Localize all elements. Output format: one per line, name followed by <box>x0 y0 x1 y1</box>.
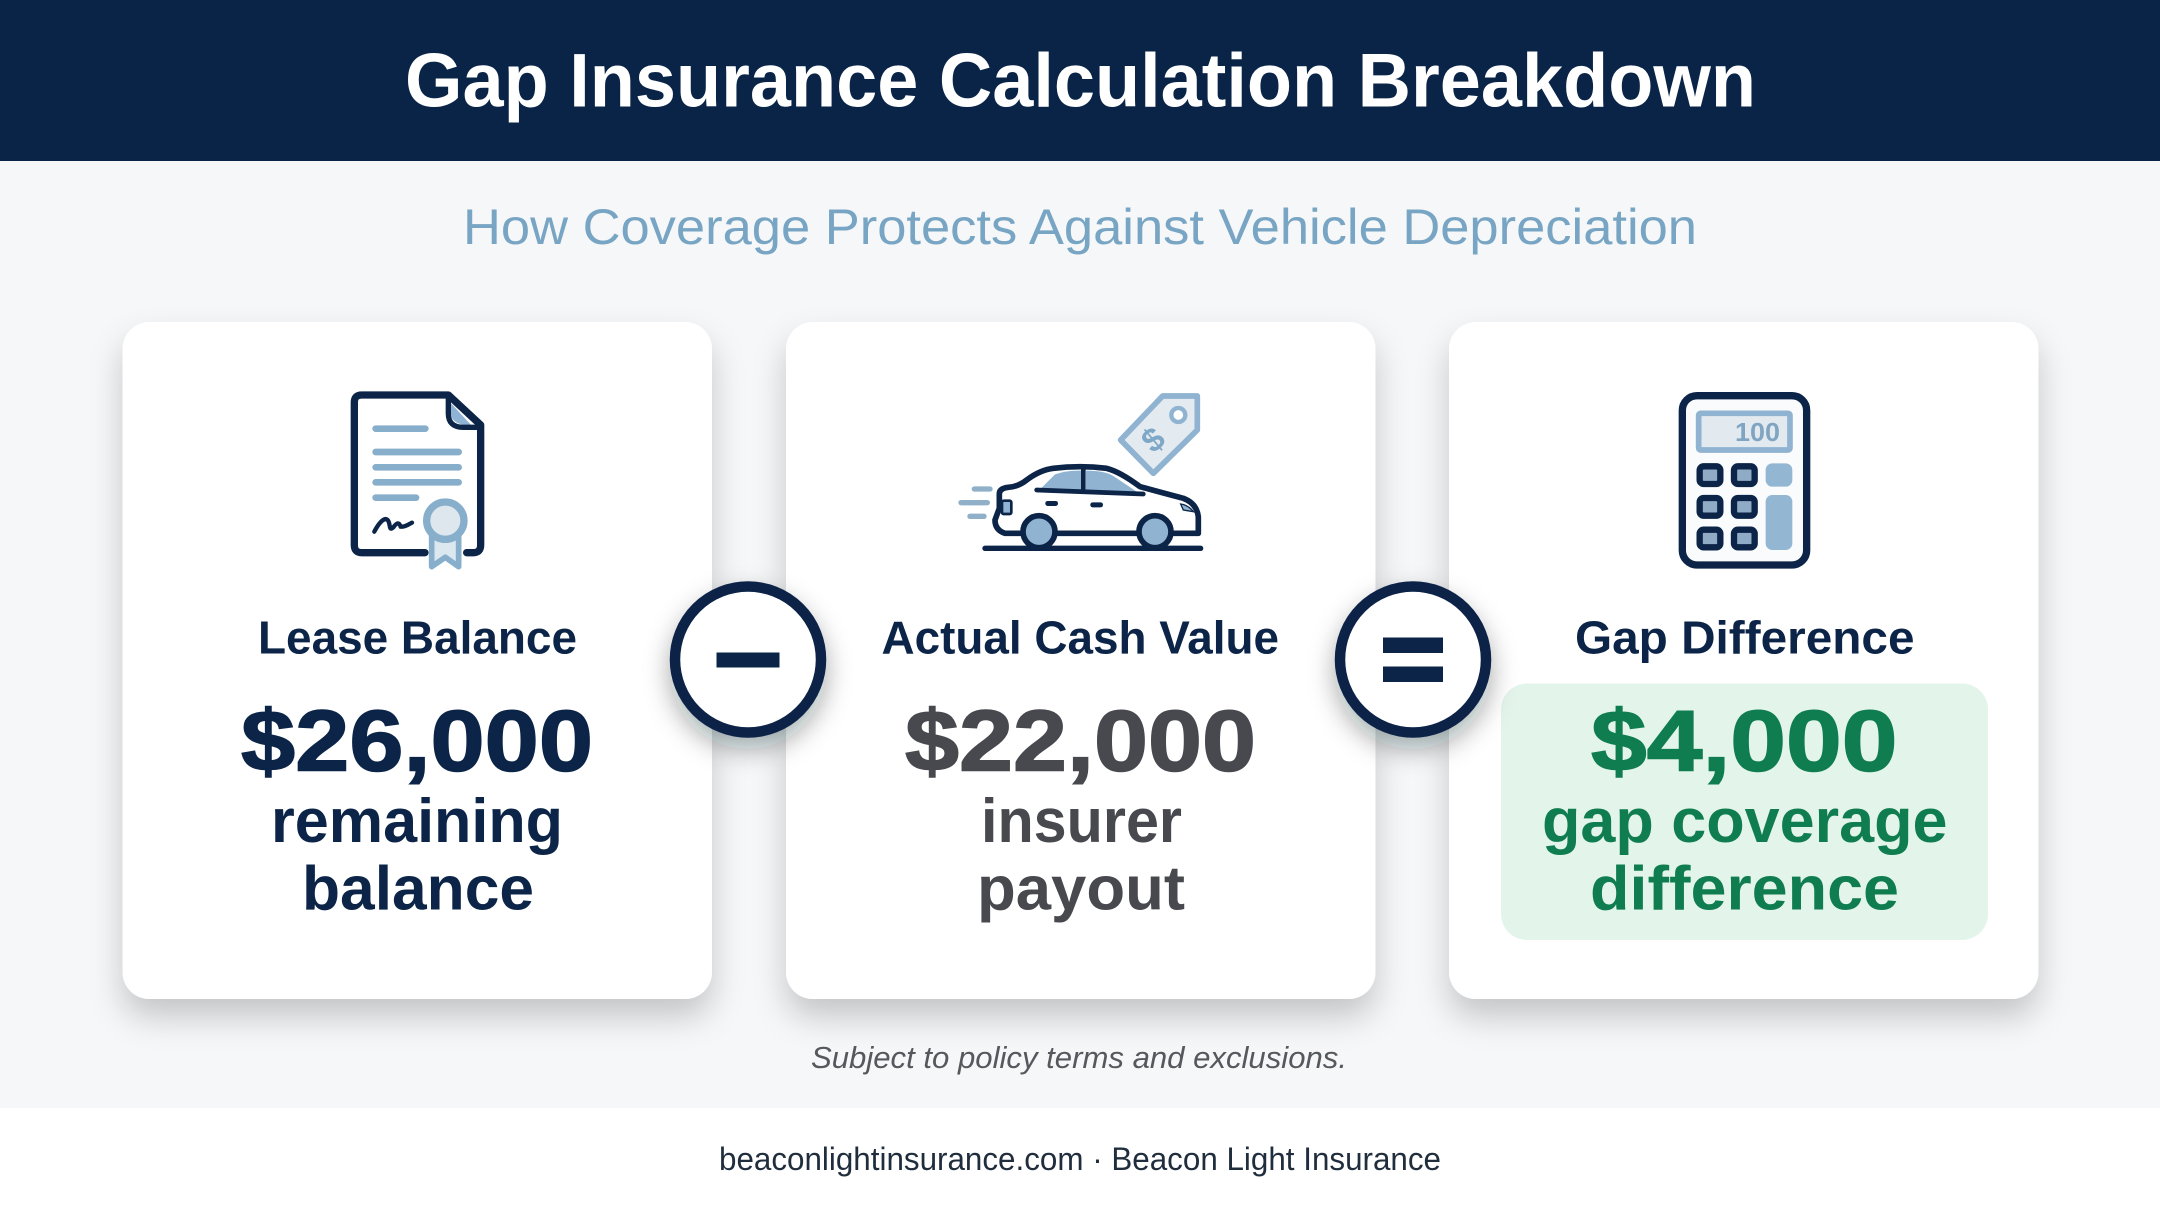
value: 4000: $4,000 <box>1591 694 1898 790</box>
value: 22000: $22,000 <box>905 694 1256 790</box>
panel: lease balance <box>122 322 712 999</box>
caption: gap coverage difference: difference <box>1590 854 1899 924</box>
caption: remaining balance: balance <box>302 854 534 924</box>
panel: actual cash value <box>786 322 1376 999</box>
highlight box: gap result <box>1501 684 1988 940</box>
icon: car with price tag <box>961 396 1201 548</box>
subtitle: How Coverage Protects Against Vehicle Depreciation <box>463 199 1697 255</box>
caption: insurer payout: payout <box>977 854 1185 924</box>
header band with title <box>0 0 2160 161</box>
panel: gap difference <box>1449 322 2038 999</box>
icon: car with price tag: $ <box>1135 420 1173 461</box>
operator: minus <box>675 586 821 732</box>
icon: calculator <box>1682 396 1807 565</box>
footer text: beaconlightinsurance.com · Beacon Light Insurance <box>719 1141 1441 1177</box>
icon: lease document with seal <box>354 395 481 567</box>
footer <box>0 1108 2160 1206</box>
caption: insurer payout <box>977 787 1185 924</box>
footnote: Subject to policy terms and exclusions. <box>811 1040 1347 1075</box>
caption: gap coverage difference <box>1542 787 1948 924</box>
title: Gap Insurance Calculation Breakdown <box>405 38 1756 124</box>
icon: calculator: 100 <box>1735 417 1780 447</box>
caption: insurer payout: insurer <box>981 787 1182 856</box>
value: 26000: $26,000 <box>241 694 593 790</box>
operator: equals <box>1340 586 1486 732</box>
heading: actual cash value: Actual Cash Value <box>882 612 1279 664</box>
heading: lease balance: Lease Balance <box>258 612 577 664</box>
caption: gap coverage difference: gap coverage <box>1542 787 1948 856</box>
caption: remaining balance <box>271 787 563 924</box>
caption: remaining balance: remaining <box>271 787 563 856</box>
heading: gap difference: Gap Difference <box>1575 612 1914 664</box>
